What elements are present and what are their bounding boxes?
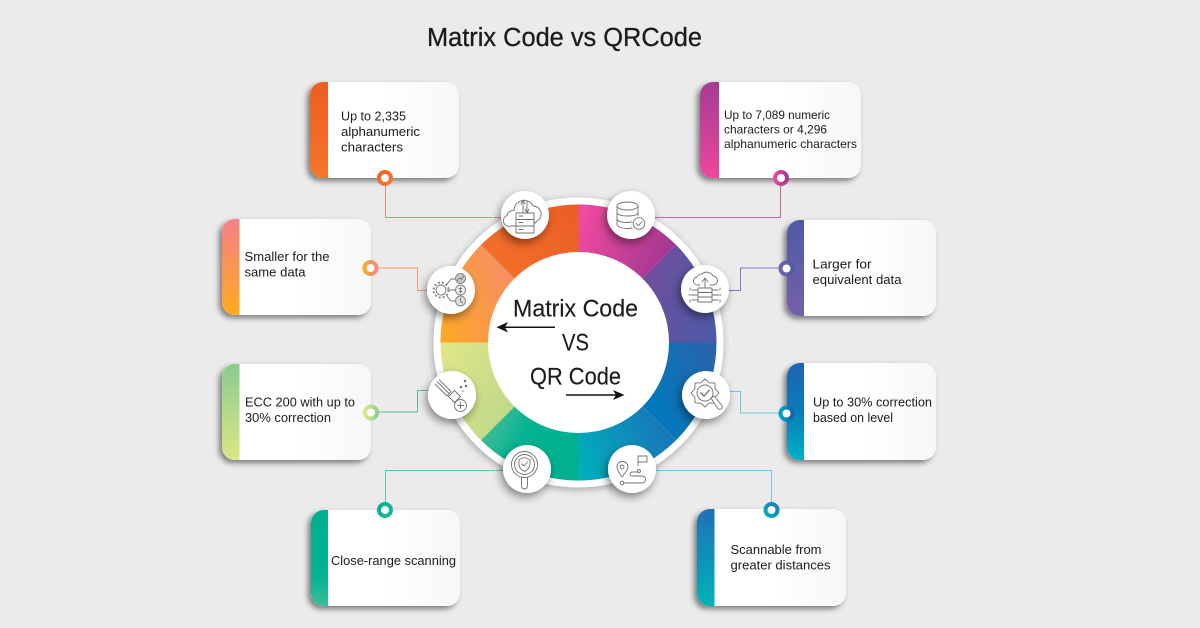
- connector dots: [364, 172, 792, 516]
- icon: cloud data network: [681, 265, 729, 313]
- panel: qr capacity: [700, 82, 861, 178]
- panel: matrix capacity: [310, 82, 459, 178]
- panel: matrix size: [222, 219, 371, 315]
- text: qr error correction: [813, 394, 932, 425]
- text: qr scanning range: [730, 542, 831, 572]
- text: matrix size: Smaller for the: [244, 249, 330, 264]
- title: Matrix Code vs QRCode: [427, 24, 702, 52]
- text: qr scanning range: Scannable from: [730, 542, 822, 557]
- text: matrix capacity: characters: [341, 140, 403, 154]
- text: qr size: equivalent data: [812, 272, 902, 287]
- icon: gear magnifier check: [682, 371, 730, 419]
- panel: qr scanning range: [697, 509, 846, 606]
- wheel: [426, 190, 730, 494]
- text: matrix error correction: 30% correction: [245, 410, 331, 425]
- arrow: left to Matrix Code: [496, 322, 555, 332]
- text: matrix capacity: alphanumeric: [341, 124, 421, 139]
- panel: matrix scanning range: [311, 510, 460, 606]
- text: qr capacity: characters or 4,296: [724, 122, 827, 136]
- text: matrix capacity: Up to 2,335: [341, 108, 406, 124]
- icon: tools repair: [428, 371, 476, 419]
- text: qr error correction: Up to 30% correction: [813, 394, 932, 410]
- center text: Matrix Code: Matrix Code: [513, 296, 638, 322]
- text: qr error correction: based on level: [813, 410, 893, 425]
- text: qr size: [812, 256, 902, 287]
- connector lines: [370, 178, 787, 510]
- arrow: right to QR Code: [566, 390, 624, 400]
- center text: QR Code: QR Code: [530, 364, 621, 390]
- panel: matrix error correction: [222, 364, 371, 460]
- text: qr capacity: alphanumeric characters: [724, 137, 857, 151]
- text: matrix error correction: [245, 394, 355, 425]
- text: matrix capacity: [341, 108, 421, 154]
- icon: cloud server: [501, 191, 549, 239]
- center text: VS: VS: [562, 330, 589, 356]
- text: qr scanning range: greater distances: [730, 558, 831, 572]
- text: matrix scanning range: Close-range scanning: [331, 553, 456, 568]
- icon: shield magnifier: [503, 445, 551, 493]
- text: matrix size: same data: [244, 264, 306, 280]
- icon: database check: [607, 191, 655, 239]
- text: qr capacity: Up to 7,089 numeric: [724, 108, 830, 122]
- panel: qr size: [787, 220, 936, 316]
- panel: qr error correction: [787, 363, 936, 460]
- icon: gears network: [427, 266, 475, 314]
- text: matrix error correction: ECC 200 with up to: [245, 394, 355, 410]
- icon: route map: [608, 445, 656, 493]
- text: matrix size: [244, 249, 330, 280]
- text: qr size: Larger for: [812, 256, 872, 272]
- text: qr capacity: [724, 108, 857, 151]
